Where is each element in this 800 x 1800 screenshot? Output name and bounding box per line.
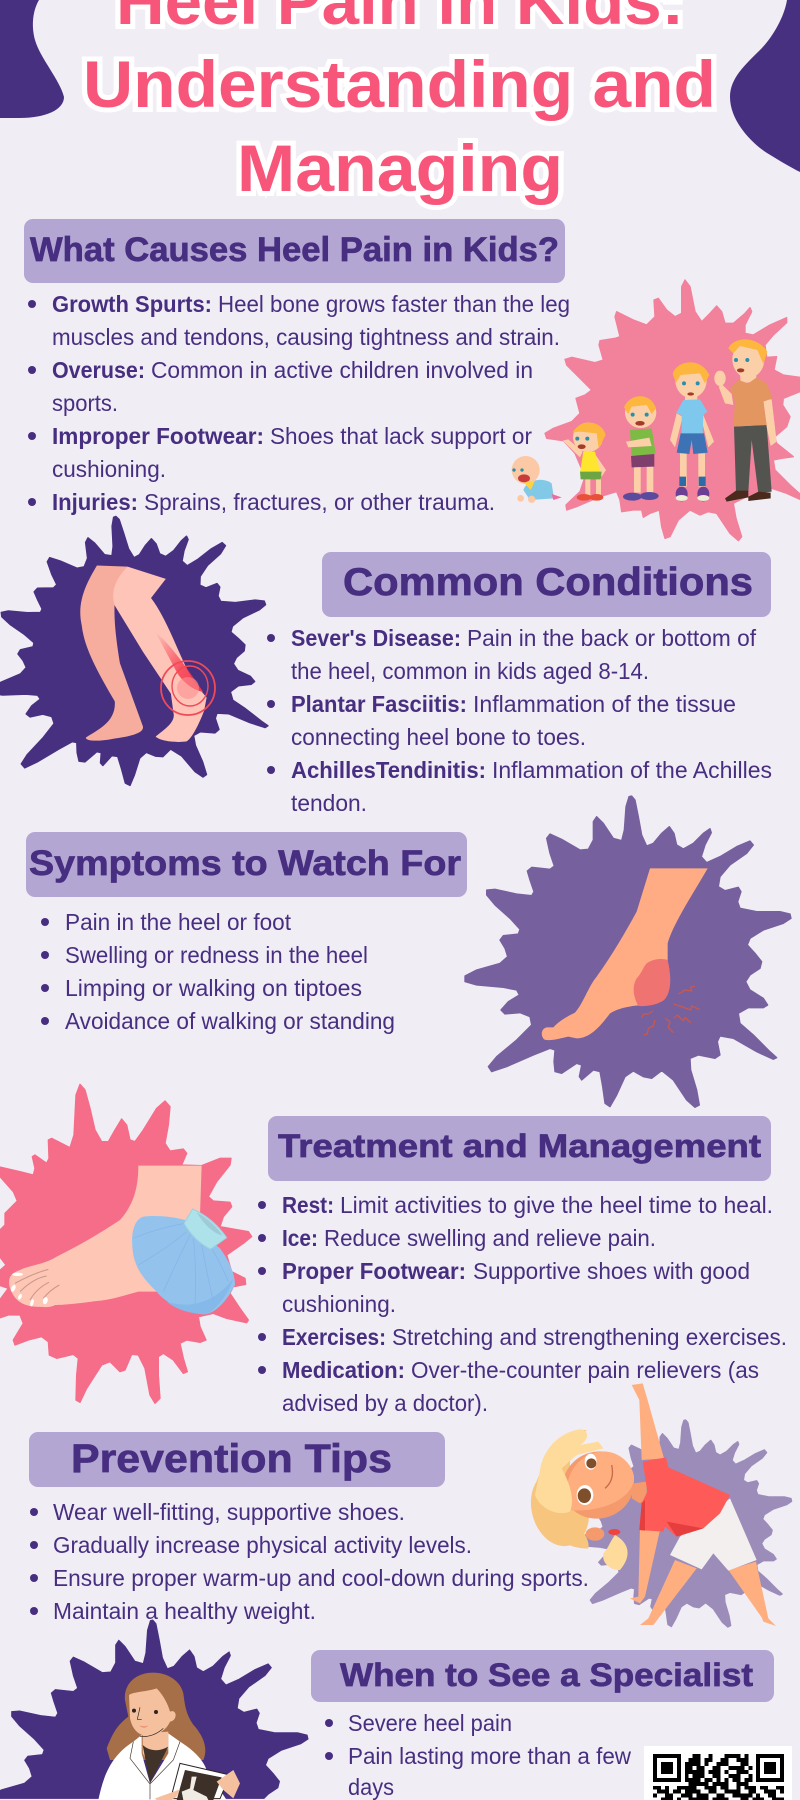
list: treatment: advised by a doctor). (282, 1390, 488, 1416)
list: treatment: Over-the-counter pain relievers (as (411, 1357, 759, 1383)
list: causes (28, 291, 570, 515)
heading: treatment (268, 1116, 771, 1181)
list: treatment: Medication: (282, 1357, 405, 1383)
list: causes: Growth Spurts: (52, 291, 212, 317)
list: conditions: AchillesTendinitis: (291, 757, 486, 783)
list: symptoms: Swelling or redness in the heel (65, 942, 368, 968)
list: prevention: Maintain a healthy weight. (53, 1598, 316, 1624)
list: symptoms: Avoidance of walking or standing (65, 1008, 395, 1034)
figure: middle boy (623, 396, 659, 501)
panel: what causes heel pain (24, 219, 800, 541)
list: prevention: Wear well-fitting, supportive shoes. (53, 1499, 405, 1525)
panel: symptoms (26, 796, 791, 1107)
list: symptoms: Limping or walking on tiptoes (65, 975, 362, 1001)
heading: what causes (24, 219, 565, 283)
list: treatment: Stretching and strengthening exercises. (392, 1324, 787, 1350)
illustration: swollen foot on purple splat (465, 796, 791, 1107)
list: causes: Injuries: (52, 489, 138, 515)
list: treatment: Proper Footwear: (282, 1258, 466, 1284)
heading: when to see a specialist: When to See a Specialist (340, 1657, 753, 1693)
list: causes: Common in active children involved in (151, 357, 533, 383)
list: prevention (30, 1499, 589, 1624)
list: causes: sports. (52, 390, 118, 416)
list: conditions: connecting heel bone to toes. (291, 724, 586, 750)
list: symptoms (41, 909, 395, 1034)
illustration: children of growing heights on pink splat (512, 280, 800, 541)
illustration: foot with ice pack on pink splat (0, 1084, 252, 1403)
decorative blob: top left (0, 0, 64, 118)
list: treatment: cushioning. (282, 1291, 396, 1317)
heading: prevention: Prevention Tips (71, 1437, 392, 1481)
panel: treatment and management (0, 1084, 787, 1416)
illustration: doctor holding x-ray on dark splat (0, 1620, 308, 1800)
list: treatment: Limit activities to give the heel time to heal. (340, 1192, 773, 1218)
title (83, 0, 716, 205)
list: symptoms: Pain in the heel or foot (65, 909, 292, 935)
list: conditions: Sever's Disease: (291, 625, 461, 651)
heading: common conditions: Common Conditions (343, 561, 753, 604)
list: prevention: Gradually increase physical activity levels. (53, 1532, 472, 1558)
list: specialist (325, 1710, 631, 1800)
list: treatment: Supportive shoes with good (473, 1258, 750, 1284)
list: conditions (267, 625, 772, 816)
heading: symptoms (26, 832, 467, 897)
heading: symptoms: Symptoms to Watch For (29, 844, 461, 883)
list: specialist: Severe heel pain (348, 1710, 512, 1736)
heading: prevention (29, 1432, 445, 1487)
decorative blob: top right (730, 0, 800, 172)
heading: common conditions (322, 552, 771, 617)
list: conditions: Plantar Fasciitis: (291, 691, 467, 717)
foot (9, 1166, 202, 1307)
figure: small child (563, 423, 606, 501)
panel: prevention tips (29, 1383, 792, 1627)
list: treatment: Rest: (282, 1192, 334, 1218)
list: prevention: Ensure proper warm-up and cool-down during sports. (53, 1565, 589, 1591)
list: treatment (258, 1192, 787, 1416)
list: causes: Overuse: (52, 357, 145, 383)
list: treatment: Ice: (282, 1225, 318, 1251)
illustration: legs with inflamed heel on dark splat (0, 500, 285, 801)
list: conditions: Inflammation of the tissue (473, 691, 736, 717)
title: Understanding and (83, 47, 716, 121)
list: conditions: Inflammation of the Achilles (492, 757, 772, 783)
list: causes: Shoes that lack support or (270, 423, 532, 449)
heading: treatment: Treatment and Management (278, 1128, 761, 1164)
ice pack (132, 1216, 235, 1314)
list: treatment: Exercises: (282, 1324, 386, 1350)
title: Managing (237, 131, 563, 205)
list: causes: muscles and tendons, causing tightness and strain. (52, 324, 560, 350)
figure: older boy (670, 362, 714, 501)
list: causes: Sprains, fractures, or other trauma. (144, 489, 495, 515)
list: causes: cushioning. (52, 456, 166, 482)
figure: crawling baby (512, 456, 562, 503)
list: conditions: Pain in the back or bottom of (467, 625, 757, 651)
list: specialist: days (348, 1774, 394, 1800)
QR code (644, 1746, 792, 1800)
list: conditions: the heel, common in kids aged 8-14. (291, 658, 649, 684)
illustration: girl stretching on lilac splat (523, 1383, 792, 1627)
heading: when to see a specialist (311, 1650, 774, 1702)
list: specialist: Pain lasting more than a few (348, 1743, 631, 1769)
list: causes: Heel bone grows faster than the leg (218, 291, 570, 317)
panel: when to see a specialist (0, 1620, 792, 1800)
list: conditions: tendon. (291, 790, 367, 816)
list: causes: Improper Footwear: (52, 423, 264, 449)
heading: what causes: What Causes Heel Pain in Kids? (30, 231, 559, 269)
list: treatment: Reduce swelling and relieve pain. (324, 1225, 656, 1251)
figure: adult boy (714, 339, 777, 502)
panel: common conditions (0, 500, 772, 816)
